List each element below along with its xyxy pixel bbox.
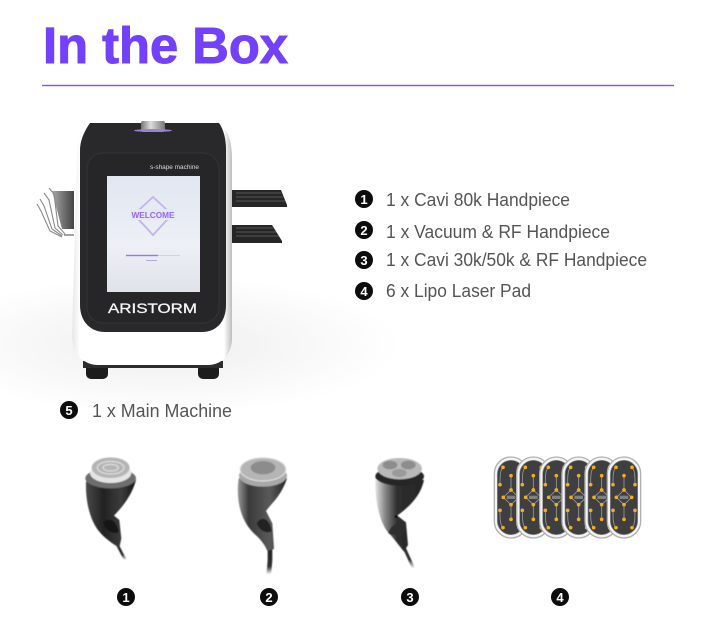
handpiece 2 bbox=[238, 458, 287, 574]
parts list bbox=[355, 190, 647, 301]
right top tray bbox=[232, 190, 287, 207]
lipo laser pads bbox=[494, 457, 641, 538]
number badge 4: 4 bbox=[556, 590, 564, 605]
item 4: 6 x Lipo Laser Pad bbox=[386, 281, 531, 301]
machine body bbox=[72, 123, 232, 365]
left handpiece holder bbox=[37, 188, 74, 237]
number badge 1: 1 bbox=[122, 590, 130, 605]
handpieces bbox=[85, 457, 424, 574]
brand name: ARISTORM bbox=[108, 300, 197, 316]
touch screen bbox=[107, 176, 200, 292]
item 5: main machine caption: 1 x Main Machine bbox=[92, 401, 232, 421]
handpiece 3 bbox=[375, 458, 424, 568]
number badge 2 bbox=[260, 588, 278, 606]
number badge 2: 2 bbox=[265, 590, 273, 605]
number badge 3 bbox=[401, 588, 419, 606]
top knob bbox=[141, 121, 165, 132]
item 2: 1 x Vacuum & RF Handpiece bbox=[386, 222, 610, 242]
title: In the Box bbox=[43, 17, 288, 74]
feet bbox=[86, 363, 108, 379]
item 3: 3 bbox=[360, 253, 368, 268]
welcome text: WELCOME bbox=[132, 210, 175, 220]
item 5: main machine caption: 5 bbox=[65, 403, 73, 418]
item 1: 1 bbox=[360, 192, 368, 207]
main machine bbox=[37, 121, 287, 379]
item 4: 4 bbox=[360, 284, 368, 299]
front black panel bbox=[80, 123, 226, 332]
number badge 3: 3 bbox=[406, 590, 414, 605]
right bottom tray bbox=[232, 225, 282, 243]
number badge 4 bbox=[551, 588, 569, 606]
model label: s-shape machine bbox=[150, 164, 199, 171]
item 1: 1 x Cavi 80k Handpiece bbox=[386, 190, 570, 210]
handpiece 1 bbox=[85, 457, 136, 560]
item 3: 1 x Cavi 30k/50k & RF Handpiece bbox=[386, 250, 647, 270]
item 2: 2 bbox=[360, 223, 368, 238]
number badge 1 bbox=[117, 588, 135, 606]
